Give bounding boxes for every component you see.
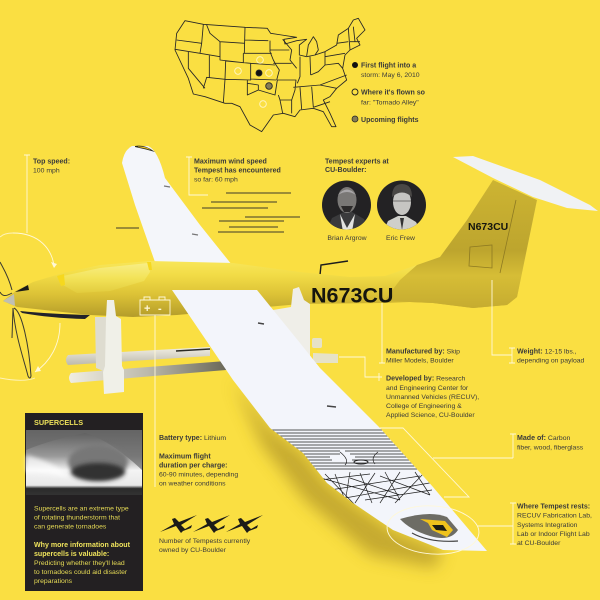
fuselage registration: N673CU (311, 284, 393, 308)
top speed: Top speed: (33, 158, 70, 166)
where Tempest rests: RECUV Fabrication Lab, (517, 512, 592, 520)
panel text: supercells is valuable: (34, 551, 109, 558)
map legend (352, 62, 426, 124)
manufactured by: Manufactured by: Skip (386, 348, 460, 356)
tail fin (385, 180, 537, 308)
battery icon: + (144, 303, 150, 315)
where Tempest rests: Where Tempest rests: (517, 504, 590, 510)
experts heading (325, 158, 389, 174)
upper wing (122, 146, 232, 265)
manufactured by: Miller Models, Boulder (386, 358, 454, 364)
developed by: and Engineering Center for (386, 385, 469, 392)
weight: Weight: 12-15 lbs., (517, 348, 577, 356)
tail registration: N673CU (468, 221, 508, 233)
developed by: Applied Science, CU-Boulder (386, 412, 475, 419)
fuselage (3, 180, 537, 317)
map legend: First flight into a (361, 62, 416, 70)
developed by: Developed by: Research (386, 376, 465, 382)
storm photo (26, 430, 142, 495)
battery icon: - (158, 303, 162, 315)
portrait: Eric Frew (377, 180, 426, 242)
map legend: storm: May 6, 2010 (361, 72, 420, 79)
antenna (320, 261, 348, 275)
canopy (57, 262, 152, 293)
where Tempest rests: Systems Integration (517, 522, 578, 529)
map legend: far: "Tornado Alley" (361, 100, 419, 106)
panel text: Why more information about (34, 542, 131, 549)
battery icon (140, 297, 170, 487)
flight duration text: Maximum flight (159, 454, 211, 460)
icon: three Tempest aircraft (160, 515, 263, 533)
lower wing (172, 290, 487, 551)
wing shadow on background (233, 380, 443, 568)
where Tempest rests: at CU-Boulder (517, 540, 561, 547)
flight duration text: duration per charge: (159, 462, 228, 470)
name: Brian Argrow (327, 235, 367, 242)
top speed (33, 158, 70, 174)
maximum wind speed: so far: 60 mph (194, 176, 238, 184)
front stand (95, 300, 124, 394)
map legend: Where it's flown so (361, 90, 426, 96)
experts heading: Tempest experts at (325, 158, 389, 166)
panel text: of rotating thunderstorm that (34, 514, 120, 522)
map markers (235, 57, 272, 107)
number owned caption: owned by CU-Boulder (159, 547, 227, 554)
number owned caption: Number of Tempests currently (159, 538, 250, 545)
developed by: Unmanned Vehicles (RECUV), (386, 394, 479, 401)
map legend: Upcoming flights (361, 117, 419, 124)
wing pattern (260, 430, 435, 505)
weight: depending on payload (517, 358, 585, 364)
battery text: Battery type: Lithium (159, 435, 226, 442)
portrait: Brian Argrow (322, 180, 371, 242)
maximum wind speed: Maximum wind speed (194, 158, 267, 166)
made of: Made of: Carbon (517, 435, 570, 442)
stand rods (66, 338, 338, 383)
experts heading: CU-Boulder: (325, 167, 366, 174)
US map of flights (175, 18, 365, 132)
panel text: Supercells are an extreme type (34, 506, 129, 512)
maximum wind speed: Tempest has encountered (194, 168, 281, 174)
panel heading: SUPERCELLS (34, 418, 83, 427)
maximum wind speed (194, 158, 281, 184)
flight duration text: 60-90 minutes, depending (159, 472, 238, 478)
flight duration text: on weather conditions (159, 480, 226, 488)
name: Eric Frew (386, 235, 415, 242)
panel text: preparations (34, 578, 73, 585)
panel text: to tornadoes could aid disaster (34, 569, 128, 576)
developed by: College of Engineering & (386, 403, 462, 410)
panel text (34, 506, 131, 585)
panel: supercells (25, 413, 143, 591)
horizontal stabilizer (453, 156, 598, 211)
made of: fiber, wood, fiberglass (517, 444, 584, 452)
top speed: 100 mph (33, 168, 60, 174)
wing logo (400, 514, 458, 541)
panel text: can generate tornadoes (34, 524, 107, 530)
nose and propeller (0, 262, 90, 378)
annotation lines: wind and speed (0, 155, 300, 380)
where Tempest rests: Lab or Indoor Flight Lab (517, 531, 590, 538)
annotation lines: right side (339, 280, 516, 557)
rear stand (273, 287, 310, 356)
panel text: Predicting whether they'll lead (34, 560, 125, 567)
